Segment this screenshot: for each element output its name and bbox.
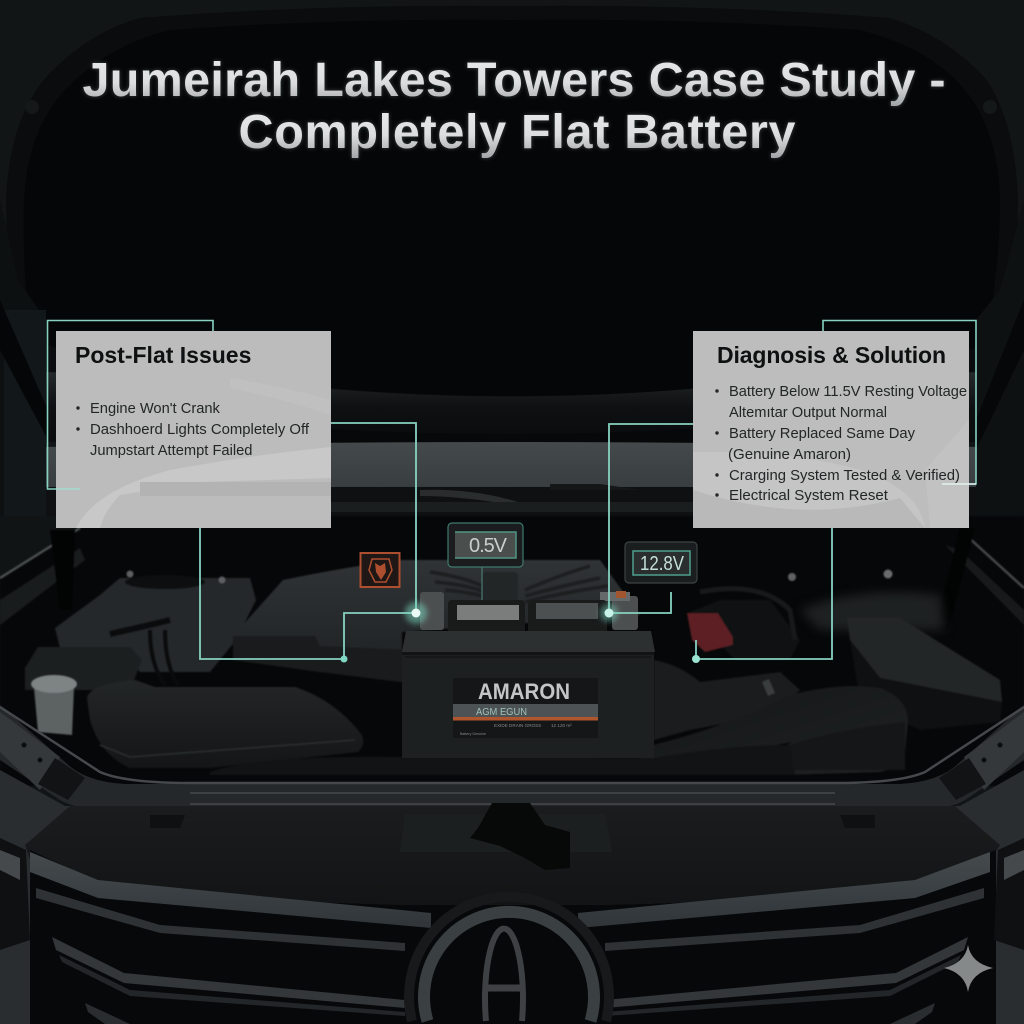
warning icon (360, 553, 400, 587)
headlights (0, 838, 30, 950)
left strut tower (55, 570, 256, 685)
title: Jumeirah Lakes Towers Case Study - (82, 53, 946, 107)
solution list (715, 384, 967, 504)
right engine parts (690, 600, 800, 660)
solution list: Altemıtar Output Normal (729, 405, 887, 421)
left air box (87, 680, 363, 768)
title: Jumeirah Lakes Towers Case Study - (82, 53, 946, 107)
solution list: Battery Replaced Same Day (729, 426, 916, 442)
radiator support frame (0, 705, 1024, 809)
panel: Post-Flat Issues (56, 331, 331, 528)
connector lines (200, 423, 832, 659)
voltmeter: 12.8V: 12.8V (640, 553, 685, 575)
battery label: EXIDE DRAIN GROSS (494, 723, 541, 728)
issue list: Engine Won't Crank (90, 401, 221, 417)
battery label: Battery Genuine (460, 732, 486, 736)
sparkle icon (944, 945, 993, 992)
battery (402, 591, 655, 758)
solution list: Crarging System Tested & Verified) (729, 468, 960, 484)
voltmeter: 0.5V (448, 523, 523, 600)
engine bay (0, 516, 1024, 786)
voltmeter: 0.5V: 0.5V (469, 535, 508, 557)
left side window and fender (0, 200, 48, 570)
emblem (409, 897, 609, 1021)
windscreen reflection band (0, 442, 1024, 516)
solution list: (Genuine Amaron) (728, 447, 851, 463)
connector nodes (340, 602, 700, 663)
title: Completely Flat Battery (238, 105, 796, 159)
heading: Post-Flat Issues (75, 342, 251, 368)
right side window and fender (976, 200, 1024, 580)
red box (687, 613, 733, 652)
heading: Diagnosis & Solution (717, 342, 946, 368)
issue list (76, 401, 310, 459)
right fuse box (847, 618, 1002, 702)
issue list: Dashhoerd Lights Completely Off (90, 422, 310, 438)
left relay box (25, 647, 142, 690)
voltmeter: 12.8V (625, 542, 697, 583)
battery terminals and tops (420, 592, 444, 630)
issue list: Jumpstart Attempt Failed (90, 443, 252, 459)
battery label: AGM EGUN (476, 706, 527, 718)
battery label: 12 120 m² (551, 723, 572, 728)
battery label: AMARON (478, 679, 570, 704)
intake duct (654, 660, 800, 740)
title (82, 53, 946, 159)
battery label (453, 678, 598, 738)
right air box (640, 686, 908, 775)
hood underside (0, 6, 1024, 444)
title: Completely Flat Battery (238, 105, 796, 159)
slam panel and grille (0, 770, 1024, 1024)
solution list: Electrical System Reset (729, 488, 888, 504)
panel: Diagnosis & Solution (693, 331, 976, 528)
solution list: Battery Below 11.5V Resting Voltage (729, 384, 967, 400)
grille bars (30, 852, 431, 928)
washer bottle (31, 675, 77, 735)
panel connector frames (behind panels) (48, 320, 976, 489)
engine cover (233, 560, 640, 682)
